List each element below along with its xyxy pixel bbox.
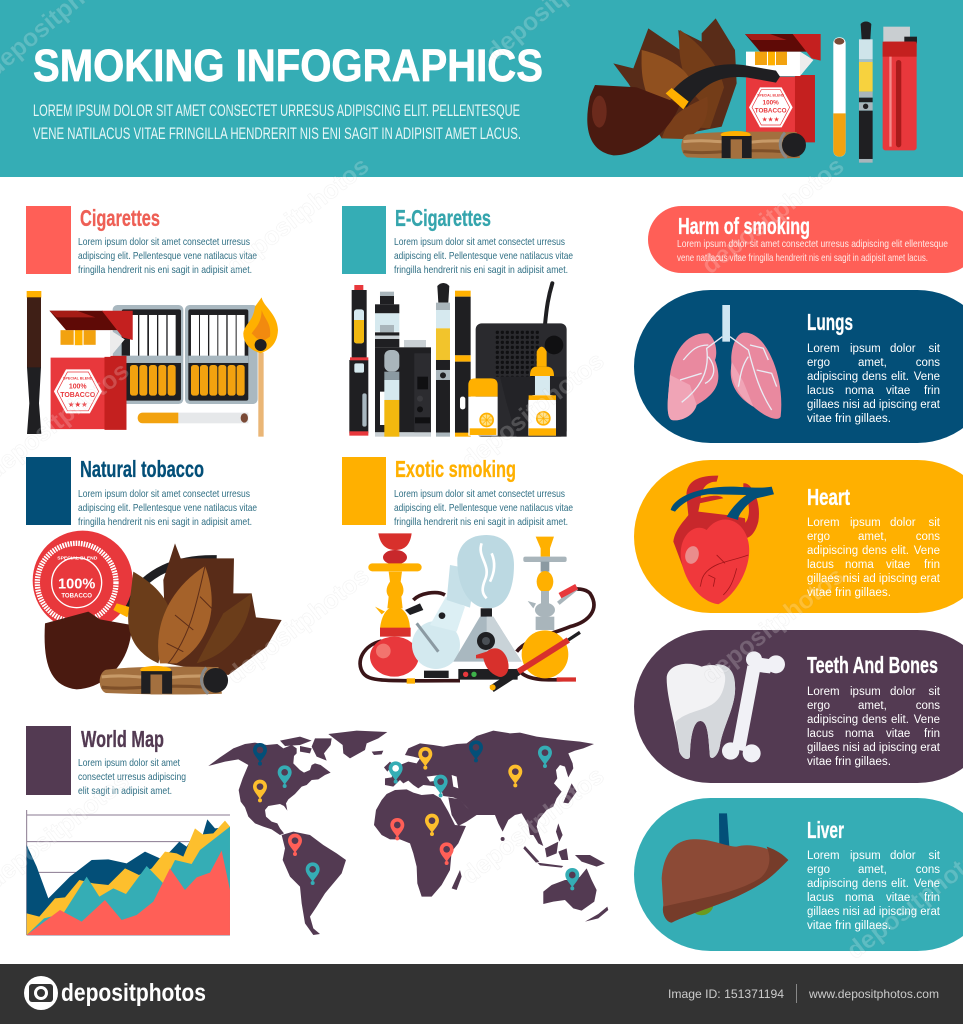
heading: Cigarettes <box>80 205 160 231</box>
badge: SPECIAL BLEND <box>57 555 98 561</box>
inland water <box>294 755 458 788</box>
watermark overlay: depositphotos <box>456 347 609 475</box>
text block: cons <box>916 700 940 712</box>
heading: Exotic smoking <box>395 456 516 482</box>
text block: sit <box>928 686 941 698</box>
website: www.depositphotos.com <box>808 987 939 1001</box>
panel: world map <box>26 726 608 935</box>
heading: Lungs <box>807 309 853 335</box>
cigarette <box>138 413 248 423</box>
text block: ipsum <box>850 517 881 529</box>
text block: Lorem ipsum dolor sit amet consectet urresus <box>394 236 565 248</box>
subtitle: LOREM IPSUM DOLOR SIT AMET CONSECTET URRESUS ADIPISCING ELIT. PELLENTESQUE <box>33 101 520 120</box>
icon: heart <box>671 476 774 604</box>
badge: TOBACCO <box>61 592 92 599</box>
mouthpiece <box>407 632 580 690</box>
text block: dens <box>862 371 887 383</box>
text block: amet, <box>858 700 887 712</box>
pipe <box>45 603 132 689</box>
text block <box>807 850 941 932</box>
text block: fringilla hendrerit nis eni sagit in adipisit amet. <box>394 516 568 528</box>
text block: lacus <box>807 559 834 571</box>
glass bong <box>405 565 476 678</box>
text block: gillaes nisi ad ipiscing erat <box>807 573 941 585</box>
footer logo: depositphotos <box>61 979 206 1007</box>
panel: lungs <box>634 290 963 443</box>
text block: Lorem ipsum dolor sit amet consectet urresus <box>78 488 250 500</box>
text block: amet, <box>858 531 887 543</box>
watermark overlay: depositphotos <box>456 762 609 890</box>
text block: noma <box>845 559 874 571</box>
cigarette pack: ★★★ <box>762 115 780 123</box>
cigar <box>100 666 228 694</box>
subtitle: VENE NATILACUS VITAE FRINGILLA HENDRERIT NIS ENI SAGIT IN ADIPISIT AMET LACUS. <box>33 124 521 143</box>
text block: Lorem <box>807 686 840 698</box>
heading block <box>26 726 71 795</box>
watermark overlay: depositphotos <box>696 152 849 280</box>
watermark overlay: depositphotos <box>221 562 374 690</box>
text block: ergo <box>807 864 830 876</box>
box mod <box>375 292 431 437</box>
heading block <box>26 206 71 274</box>
text block: Lorem ipsum dolor sit amet consectet urresus <box>78 236 250 248</box>
yellow hookah <box>522 537 577 678</box>
text block: consectet urresus adipiscing <box>78 771 186 783</box>
text block: vitae <box>886 385 910 397</box>
tobacco leaves <box>128 543 282 675</box>
text block: adipiscing elit. Pellentesque vene natilacus vitae <box>394 502 573 514</box>
text block: elit. <box>891 545 909 557</box>
panel: liver <box>634 798 963 951</box>
text block <box>807 517 941 599</box>
text block: cons <box>916 357 940 369</box>
subtitle <box>33 101 521 143</box>
tobacco leaves <box>613 18 737 139</box>
text block: Lorem ipsum dolor sit amet <box>78 757 180 769</box>
hoses <box>360 589 594 681</box>
text block: sit <box>928 850 941 862</box>
panel: e-cigarettes <box>342 205 573 437</box>
text block: elit. <box>891 371 909 383</box>
pipe <box>587 64 780 155</box>
text block: dens <box>862 714 887 726</box>
text block: adipiscing elit. Pellentesque vene natilacus vitae <box>78 502 257 514</box>
text block: Lorem ipsum dolor sit amet consectet urresus <box>394 488 565 500</box>
text block: noma <box>845 385 874 397</box>
dropper bottle <box>528 347 556 436</box>
illustration: tobacco <box>33 531 282 694</box>
heading: World Map <box>81 726 164 752</box>
panel: heart <box>634 460 963 613</box>
heading: E-Cigarettes <box>395 205 491 231</box>
text block: lacus <box>807 728 834 740</box>
text block: vitae frin gillaes. <box>807 587 891 599</box>
vaporizer <box>453 535 522 680</box>
lighter <box>883 27 917 150</box>
text block <box>78 236 257 276</box>
text block: adipiscing <box>807 371 858 383</box>
text block: sit <box>928 343 941 355</box>
text block <box>394 488 573 528</box>
text block: Lorem <box>807 850 840 862</box>
title: SMOKING INFOGRAPHICS <box>33 40 543 91</box>
text block: gillaes nisi ad ipiscing erat <box>807 399 941 411</box>
cigarette pack: 100% <box>763 100 779 107</box>
text block: Vene <box>914 371 940 383</box>
pins <box>253 740 579 890</box>
header illustration: smoking items <box>587 18 917 163</box>
cigar <box>681 131 806 159</box>
heading block <box>342 206 386 274</box>
illustration: vape devices <box>349 283 567 437</box>
text block: Vene <box>914 878 940 890</box>
heading: Natural tobacco <box>80 456 204 482</box>
red hookah <box>368 533 422 677</box>
pipe stem behind <box>127 559 217 607</box>
vape pen <box>349 285 368 436</box>
large vaporizer <box>476 283 567 437</box>
text block: cons <box>916 531 940 543</box>
text block: adipiscing <box>807 714 858 726</box>
text block: dens <box>862 878 887 890</box>
text block: dolor <box>890 343 916 355</box>
heading block <box>26 457 71 525</box>
text block <box>807 686 941 768</box>
text block: ipsum <box>850 343 881 355</box>
text block <box>78 757 186 797</box>
text block: vitae <box>886 559 910 571</box>
panel: natural tobacco <box>26 456 282 694</box>
text block: elit. <box>891 878 909 890</box>
text block: frin <box>924 892 940 904</box>
icon: liver <box>662 813 788 923</box>
cigarette pack: 100% <box>69 383 87 390</box>
text block <box>807 343 941 425</box>
heading block <box>342 457 386 525</box>
text block: vitae frin gillaes. <box>807 756 891 768</box>
text block: amet, <box>858 357 887 369</box>
text block: adipiscing elit. Pellentesque vene natilacus vitae <box>394 250 573 262</box>
e-cigarette <box>436 283 450 437</box>
text block: adipiscing <box>807 878 858 890</box>
text block: vitae <box>886 892 910 904</box>
cigarette pack: SPECIAL BLEND <box>63 377 93 381</box>
cigarette pack: TOBACCO <box>60 392 96 399</box>
cigarette <box>833 37 846 157</box>
cigarette pack: TOBACCO <box>755 107 787 114</box>
illustration: hookahs <box>360 533 594 690</box>
text block: Vene <box>914 545 940 557</box>
panel: exotic smoking <box>342 456 594 690</box>
text block: noma <box>845 728 874 740</box>
text block: adipiscing elit. Pellentesque vene natilacus vitae <box>78 250 257 262</box>
text block <box>394 236 573 276</box>
panel: harm of smoking <box>648 206 963 273</box>
heading: Heart <box>807 484 850 510</box>
panel: teeth and bones <box>634 630 963 783</box>
text block: ergo <box>807 531 830 543</box>
heading: Liver <box>807 817 844 843</box>
match <box>243 297 278 437</box>
icon: bone <box>722 651 785 762</box>
badge: 100% <box>58 575 95 592</box>
text block: Vene <box>914 714 940 726</box>
panel: cigarettes <box>26 205 278 437</box>
continents <box>208 731 608 935</box>
image id: Image ID: 151371194 <box>668 987 784 1001</box>
text block: amet, <box>858 864 887 876</box>
footer logo <box>24 976 206 1010</box>
icon: lungs <box>668 305 781 420</box>
cigarette pack: ★★★ <box>68 400 88 409</box>
text block: adipiscing <box>807 545 858 557</box>
e-cigarette <box>859 21 873 163</box>
text block: sit <box>928 517 941 529</box>
text block: fringilla hendrerit nis eni sagit in adipisit amet. <box>78 516 252 528</box>
text block: vitae <box>886 728 910 740</box>
area chart <box>27 810 230 935</box>
text block: lacus <box>807 385 834 397</box>
text block <box>677 238 948 264</box>
badge <box>33 531 133 631</box>
text block: frin <box>924 728 940 740</box>
text block: dolor <box>890 517 916 529</box>
lemon juice box <box>468 378 498 436</box>
cigarette pack: SPECIAL BLEND <box>757 94 785 98</box>
text block: dens <box>862 545 887 557</box>
text block: dolor <box>890 686 916 698</box>
text block: fringilla hendrerit nis eni sagit in adipisit amet. <box>78 264 252 276</box>
header banner <box>0 0 963 177</box>
text block: ergo <box>807 357 830 369</box>
vape stick <box>455 291 471 437</box>
text block <box>78 488 257 528</box>
text block: dolor <box>890 850 916 862</box>
text block: noma <box>845 892 874 904</box>
heading: Harm of smoking <box>678 213 810 239</box>
text block: gillaes nisi ad ipiscing erat <box>807 742 941 754</box>
watermark overlay: depositphotos <box>696 562 849 690</box>
world map with pins <box>208 731 608 935</box>
cigarette case <box>113 305 258 404</box>
text block: elit. <box>891 714 909 726</box>
cigarette pack <box>49 311 133 430</box>
text block: lacus <box>807 892 834 904</box>
text block: fringilla hendrerit nis eni sagit in adipisit amet. <box>394 264 568 276</box>
icon: tooth <box>667 664 735 759</box>
footer bar <box>0 964 963 1024</box>
text block: ipsum <box>850 686 881 698</box>
text block: gillaes nisi ad ipiscing erat <box>807 906 941 918</box>
text block: frin <box>924 559 940 571</box>
text block: vitae frin gillaes. <box>807 413 891 425</box>
illustration: cigarette items <box>27 291 278 437</box>
text block: frin <box>924 385 940 397</box>
watermark overlay: depositphotos <box>221 152 374 280</box>
text block: ipsum <box>850 850 881 862</box>
text block: elit sagit in adipisit amet. <box>78 785 172 797</box>
cigarette pack <box>745 34 821 142</box>
holder <box>27 291 41 434</box>
text block: ergo <box>807 700 830 712</box>
text block: cons <box>916 864 940 876</box>
text block: vitae frin gillaes. <box>807 920 891 932</box>
text block: Lorem <box>807 517 840 529</box>
text block: Lorem <box>807 343 840 355</box>
